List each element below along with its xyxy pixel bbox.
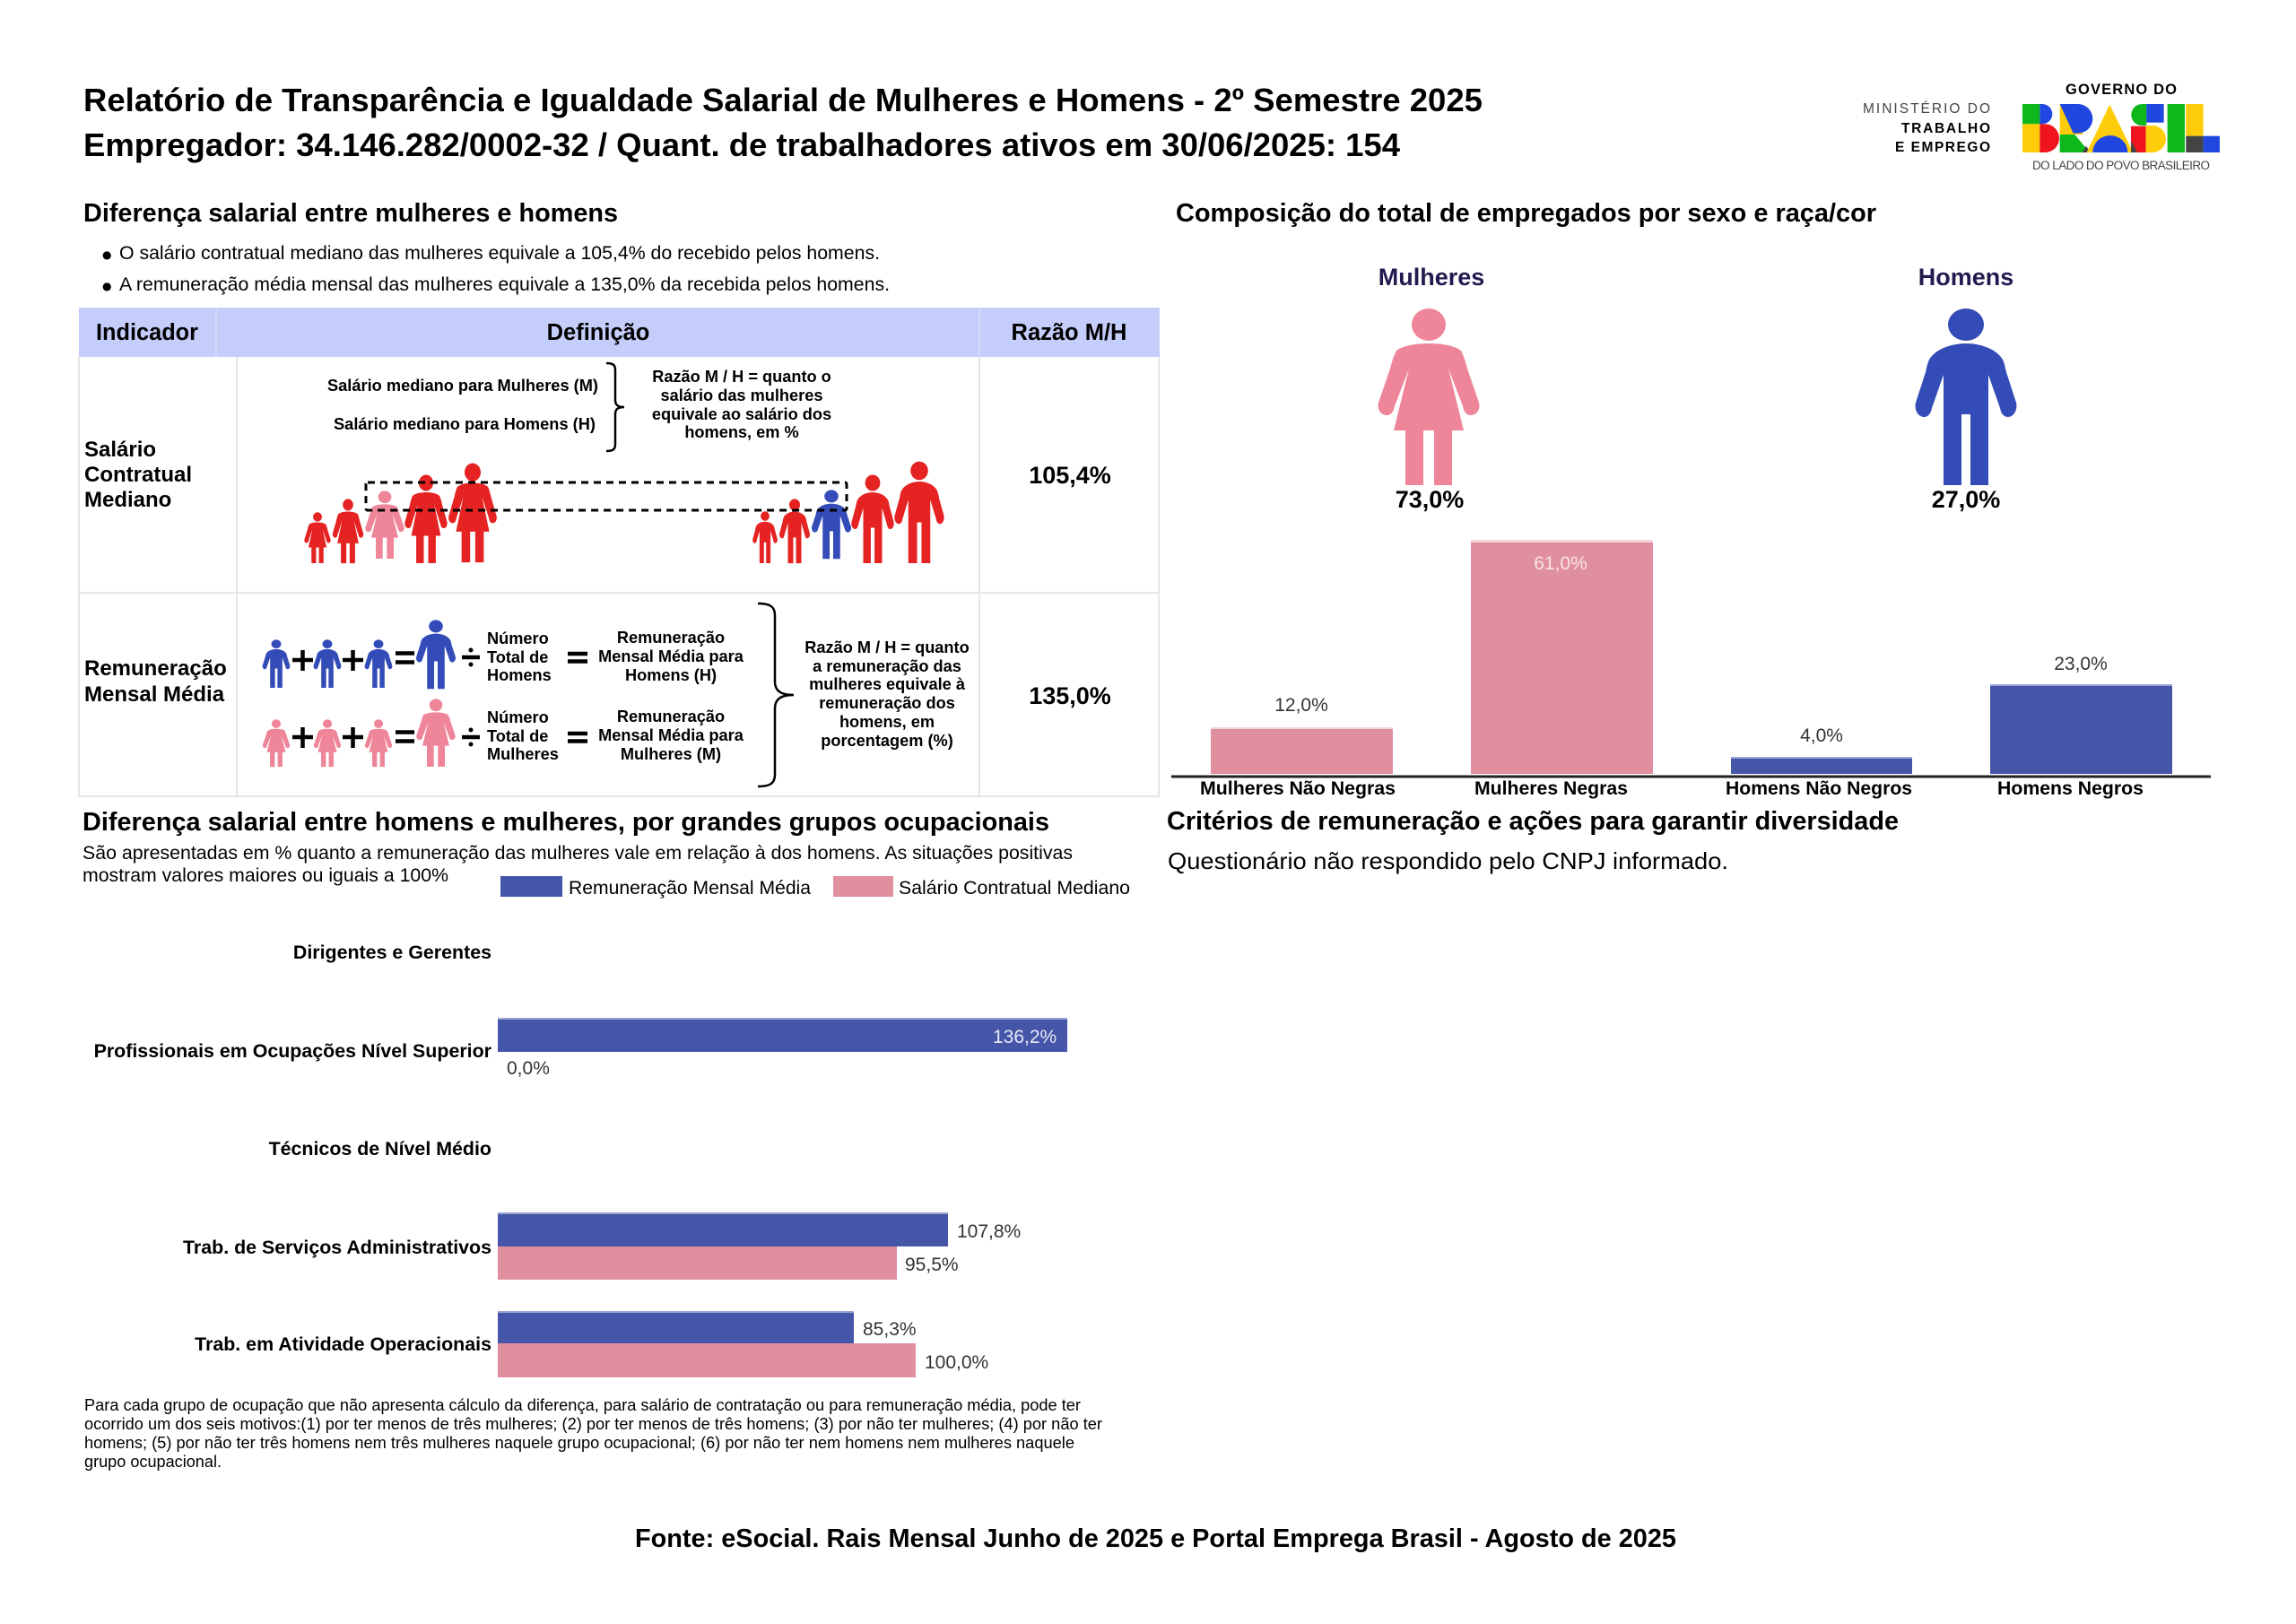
questionnaire note: Questionário não respondido pelo CNPJ informado. [1168,847,1728,874]
value: 105,4% [1029,462,1111,489]
average pay results: Remuneração [617,708,725,725]
category: profissionais nível superior: 0,0% [507,1058,550,1079]
row label: Mediano [84,488,171,512]
category labels: Mulheres Não Negras [1200,777,1396,799]
panel: women share [1378,264,1484,513]
ratio explanation: remuneração dos [819,694,955,712]
average pay results: Mensal Média para [598,726,744,744]
description text: mostram valores maiores ou iguais a 100% [83,865,448,886]
category: serviços administrativos: Trab. de Serviços Administrativos [183,1237,491,1258]
icons: women ordered by salary [304,464,497,563]
table header [79,308,1160,357]
footnote: homens; (5) por não ter três homens nem três mulheres naquele grupo ocupacional; (6) por não ter nem homens nem mulheres naquele [84,1433,1074,1452]
bar: mulheres não negras: 12,0% [1274,695,1328,716]
value: 135,0% [1029,682,1111,709]
bar: homens não negros [1731,725,1912,774]
footnote: grupo ocupacional. [84,1452,222,1471]
bar: homens negros [1990,654,2172,774]
category: profissionais nível superior: Profissionais em Ocupações Nível Superior [94,1040,491,1062]
category labels: Homens Não Negros [1726,777,1912,799]
BRASIL coloured mark [2022,104,2220,152]
ratio explanation: homens, em % [684,423,799,441]
description text [83,843,1073,886]
value: 27,0% [1932,486,2000,513]
category: serviços administrativos [183,1212,1021,1280]
total divisors: Mulheres [487,745,559,763]
icons: men ordered by salary [752,462,944,563]
ratio explanation: salário das mulheres [661,386,822,404]
row label: Remuneração [84,656,227,681]
median salary labels: Salário mediano para Homens (H) [334,415,596,433]
ratio explanation: a remuneração das [813,657,961,675]
ratio explanation [804,638,970,750]
row label: Contratual [84,463,192,487]
category: serviços administrativos: 95,5% [905,1255,959,1275]
footnote: Para cada grupo de ocupação que não apresenta cálculo da diferença, para salário de contratação ou para remuneração média, pode ter [84,1395,1081,1414]
ratio explanation: equivale ao salário dos [652,405,831,423]
horizontal bar chart: grupos ocupacionais [94,942,1067,1377]
panel: indicator table [79,308,1160,796]
legend: Salário Contratual Mediano [899,878,1130,899]
row label [84,656,227,707]
source footer: Fonte: eSocial. Rais Mensal Junho de 2025 e Portal Emprega Brasil - Agosto de 2025 [635,1524,1676,1553]
government tagline top: GOVERNO DO [2066,82,2177,98]
legend [500,876,1130,899]
row: salário contratual mediano [84,363,1111,563]
total divisors: Número [487,708,549,726]
table header: Definição [547,320,649,345]
bar chart: sexo e raça/cor [1171,540,2211,799]
bullet list: key findings: O salário contratual mediano das mulheres equivale a 105,4% do recebido pelos homens. [119,242,880,264]
title [83,82,1483,163]
bar: homens negros: 23,0% [2054,654,2108,674]
bullet list: key findings: A remuneração média mensal das mulheres equivale a 135,0% da recebida pelos homens. [119,274,890,295]
label: Mulheres [1378,264,1484,291]
ministry wordmark: TRABALHO [1901,121,1990,136]
value: 73,0% [1396,486,1464,513]
ratio explanation: mulheres equivale à [809,675,966,693]
men equation icons [263,620,480,689]
row label [84,438,192,512]
table header: Indicador [96,320,198,345]
icon: man [1916,308,2016,485]
category: dirigentes e gerentes: Dirigentes e Gerentes [293,942,491,963]
total divisors: Total de [487,727,548,745]
ministry wordmark: MINISTÉRIO DO [1863,101,1990,117]
ratio explanation: Razão M / H = quanto [804,638,970,656]
bullet list: key findings: ● [102,280,111,292]
category: atividade operacionais: Trab. em Atividade Operacionais [195,1333,491,1355]
total divisors [487,630,559,763]
category: técnicos: Técnicos de Nível Médio [269,1138,491,1159]
total divisors: Número [487,630,549,647]
average pay results: Mulheres (M) [621,745,721,763]
category: profissionais nível superior: 136,2% [993,1027,1057,1047]
total divisors: Homens [487,666,552,684]
large brace [758,604,794,786]
category labels: Homens Negros [1997,777,2144,799]
title: Relatório de Transparência e Igualdade Salarial de Mulheres e Homens - 2º Semestre 2025 [83,82,1483,118]
heading: grupos ocupacionais: Diferença salarial entre homens e mulheres, por grandes grupos ocupacionais [83,808,1049,837]
row: remuneração mensal média [84,604,1111,786]
ratio explanation: Razão M / H = quanto o [652,368,831,386]
ratio explanation: porcentagem (%) [821,732,953,750]
legend: Remuneração Mensal Média [569,878,811,899]
row label: Salário [84,438,156,462]
ministry wordmark: E EMPREGO [1895,140,1990,155]
bullet list: key findings: ● [102,248,111,261]
title: Empregador: 34.146.282/0002-32 / Quant. de trabalhadores ativos em 30/06/2025: 154 [83,126,1401,163]
average pay results: Homens (H) [625,666,717,684]
icon: woman [1378,308,1479,485]
row label: Mensal Média [84,682,225,707]
heading: diferença salarial: Diferença salarial entre mulheres e homens [83,199,618,228]
heading: composição: Composição do total de empregados por sexo e raça/cor [1176,199,1876,228]
brace [606,363,624,451]
table header: Razão M/H [1012,320,1126,345]
average pay results: Remuneração [617,629,725,647]
ratio explanation [652,368,831,441]
median salary labels: Salário mediano para Mulheres (M) [327,377,598,395]
women equation icons [263,699,480,767]
government tagline bottom: DO LADO DO POVO BRASILEIRO [2032,159,2210,172]
category: serviços administrativos: 107,8% [957,1221,1021,1242]
bar: mulheres negras: 61,0% [1534,553,1587,574]
equals signs [568,654,587,741]
category labels [1200,777,2144,799]
label: Homens [1918,264,2013,291]
category: atividade operacionais [195,1311,988,1377]
total divisors: Total de [487,648,548,666]
bullet list: key findings [102,242,890,295]
bar: mulheres não negras [1211,695,1393,774]
category: atividade operacionais: 85,3% [863,1319,917,1340]
description text: São apresentadas em % quanto a remuneração das mulheres vale em relação à dos homens. As situações positivas [83,843,1073,864]
average pay results: Mensal Média para [598,647,744,665]
category: atividade operacionais: 100,0% [925,1352,988,1373]
ministry wordmark [1863,101,1990,155]
panel: men share [1916,264,2016,513]
average pay results [598,629,744,763]
ratio explanation: homens, em [839,713,935,731]
median salary labels [327,377,598,433]
bar: mulheres negras [1471,540,1653,774]
heading: critérios: Critérios de remuneração e ações para garantir diversidade [1167,807,1899,836]
category labels: Mulheres Negras [1474,777,1628,799]
dashed median highlight [366,482,847,510]
bar: homens não negros: 4,0% [1800,725,1843,746]
category: profissionais nível superior [94,1018,1067,1079]
footnote: ocorrido um dos seis motivos:(1) por ter menos de três mulheres; (2) por ter menos de três homens; (3) por não ter mulheres; (4) por não ter [84,1414,1102,1433]
footnote [84,1395,1102,1471]
logo: ministério e governo do Brasil [1863,82,2220,172]
